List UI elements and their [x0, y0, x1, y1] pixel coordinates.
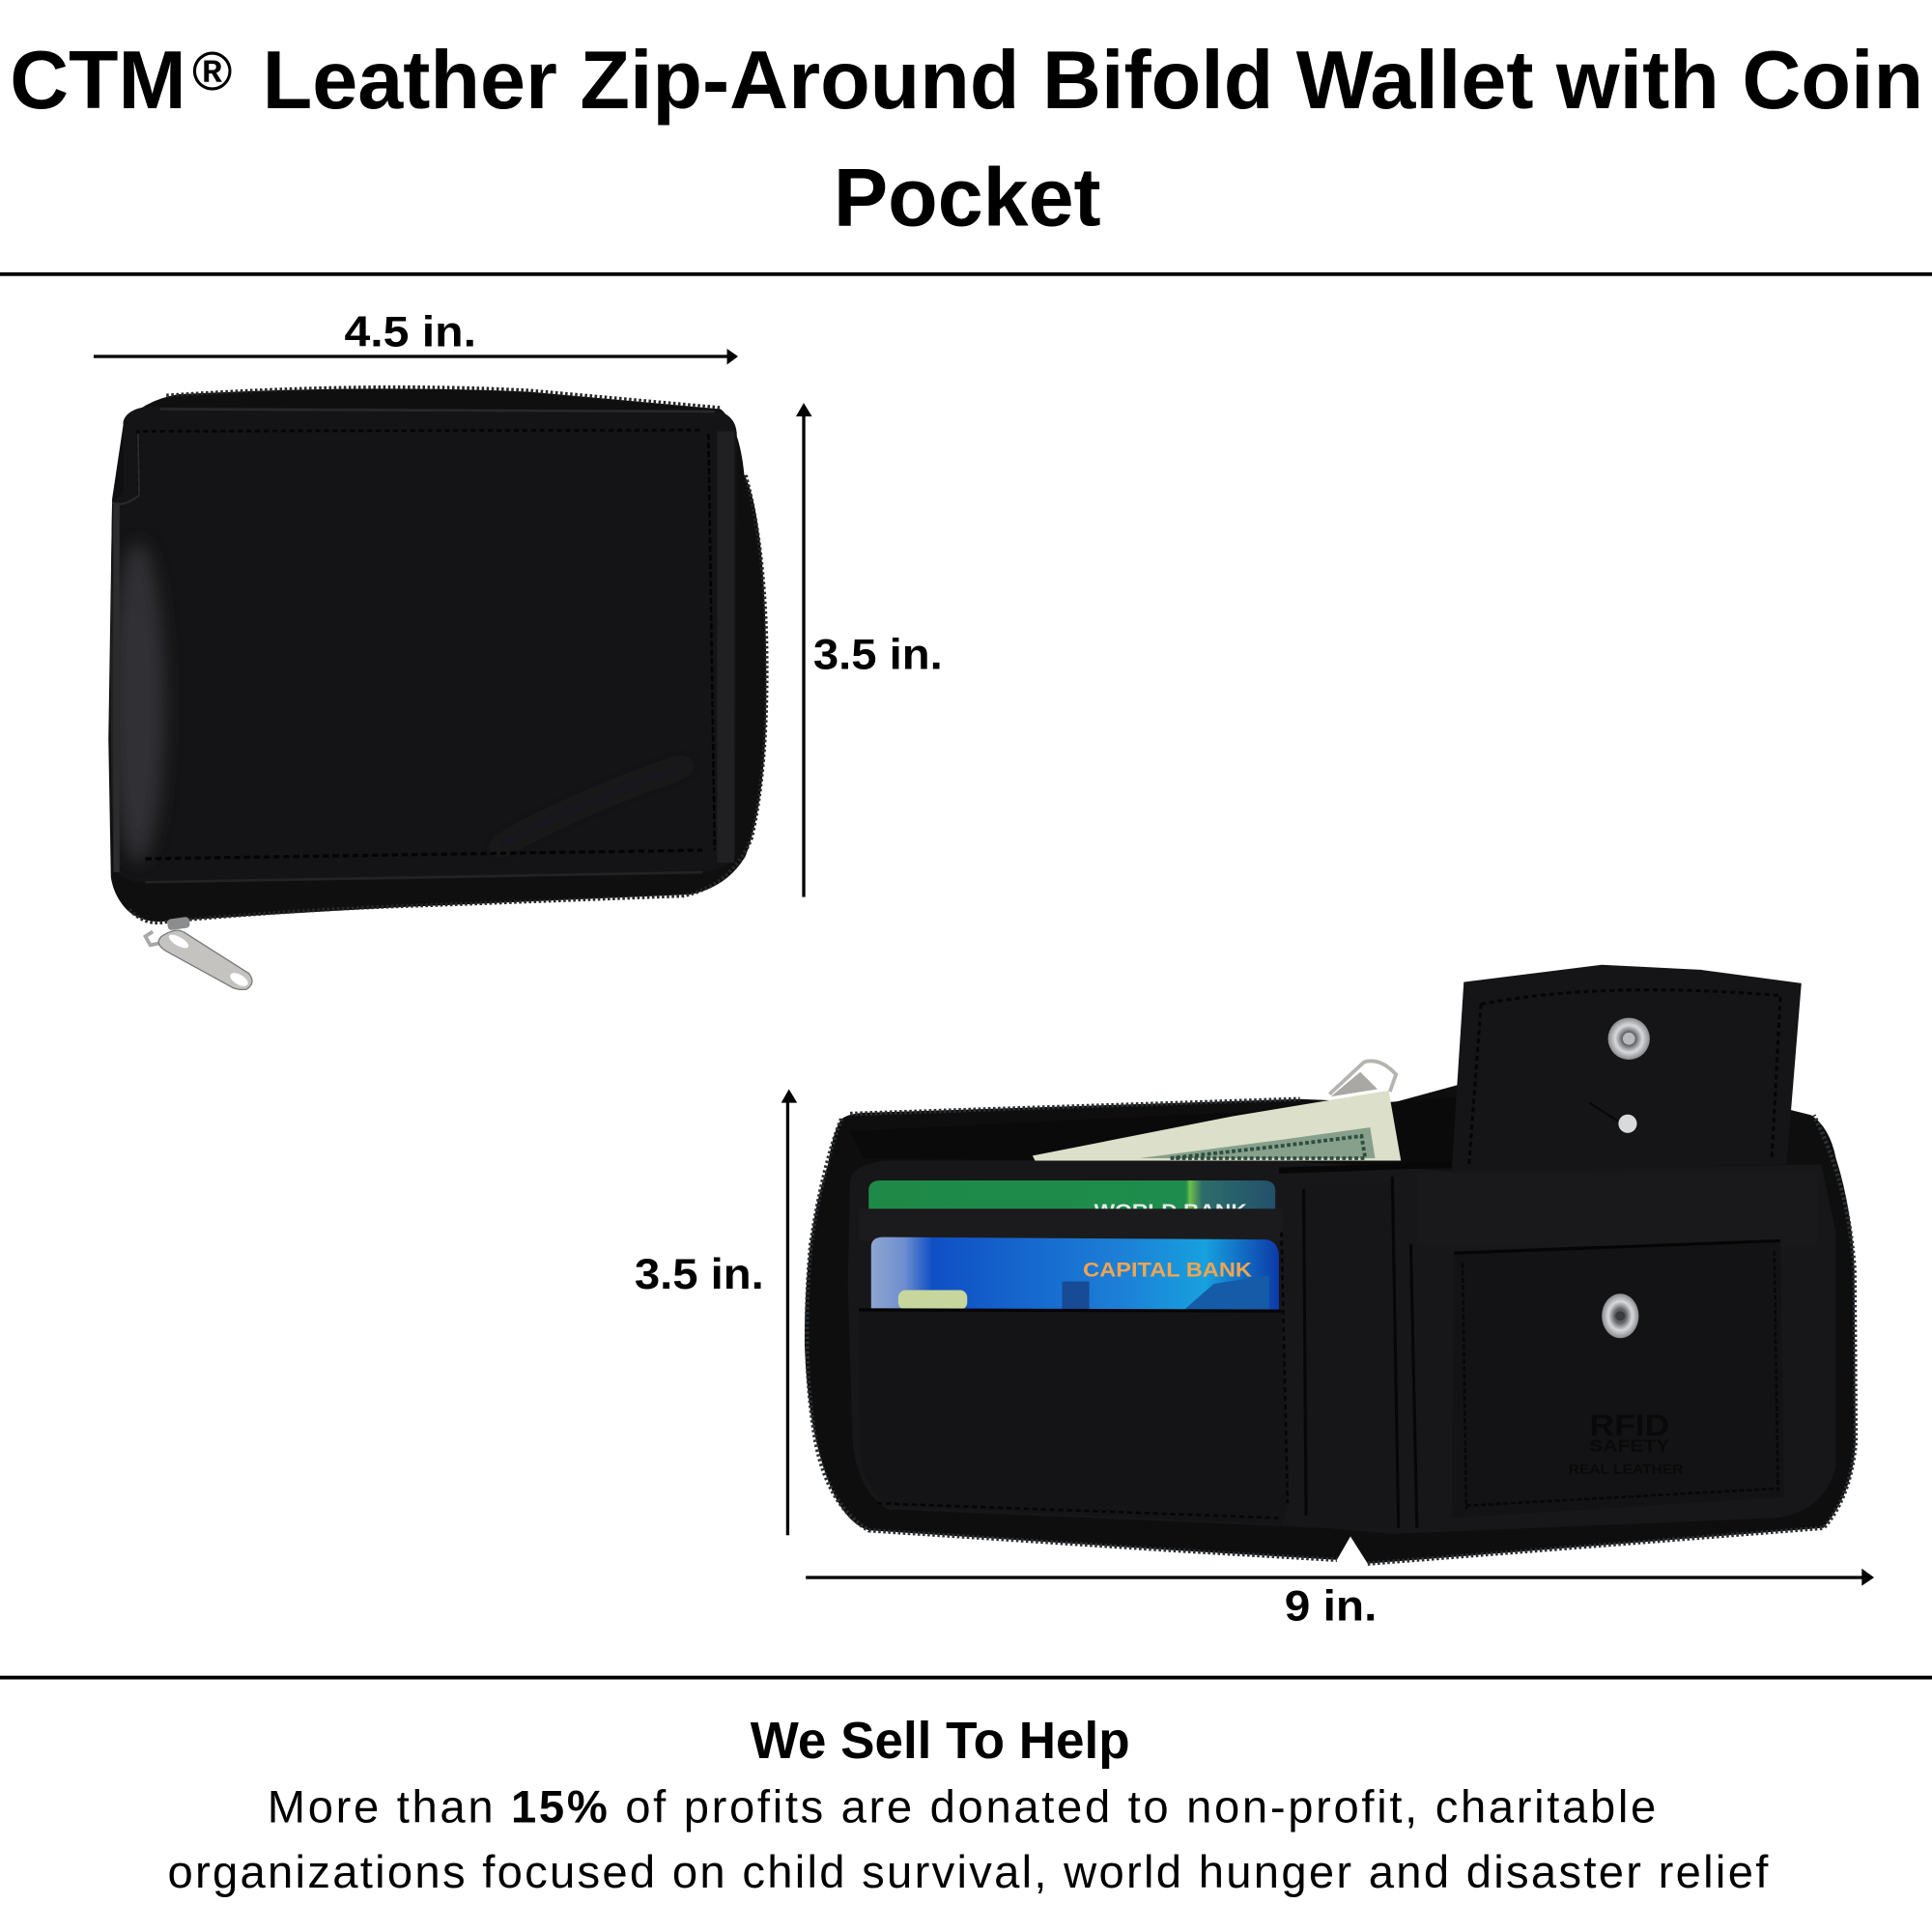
interior leather [848, 1161, 1836, 1534]
zipper edge [807, 1099, 1856, 1564]
dollar bill [1033, 1091, 1401, 1161]
photo: closed wallet [108, 387, 767, 989]
raised coin flap [1452, 965, 1802, 1172]
embossed RFID mark: RFID [1589, 1407, 1669, 1442]
embossed RFID mark: REAL LEATHER [1569, 1462, 1683, 1477]
dimension: top wallet height: 3.5 in. [813, 632, 943, 679]
dimension: top wallet width: 4.5 in. [345, 308, 476, 355]
card: Capital Bank [871, 1237, 1279, 1311]
dimension: top wallet height [796, 403, 943, 897]
stitching [138, 430, 702, 496]
photo: open wallet [805, 965, 1856, 1564]
upper right panel [1417, 1173, 1817, 1247]
section heading: we sell to help: We Sell To Help [751, 1713, 1130, 1770]
title: Pocket [834, 152, 1101, 243]
dimension: open wallet height [635, 1090, 797, 1535]
dimension: open wallet width: 9 in. [1285, 1582, 1377, 1630]
donation statement: organizations focused on child survival, world hunger and disaster relief [167, 1847, 1769, 1898]
dimension: open wallet height: 3.5 in. [635, 1251, 764, 1298]
card: World Bank [868, 1180, 1275, 1222]
embossed RFID mark: SAFETY [1589, 1436, 1669, 1456]
card: Capital Bank: CAPITAL BANK [1083, 1257, 1252, 1281]
title: ® [192, 41, 232, 101]
dimension: open wallet width [806, 1569, 1874, 1630]
card slot [859, 1208, 1283, 1240]
zipper pull behind bill [1329, 1061, 1396, 1096]
leather front panel [111, 407, 737, 882]
leather shading [111, 431, 734, 872]
coin pocket with snap [1452, 1240, 1784, 1518]
zipper teeth [129, 387, 767, 923]
inner back band [850, 1096, 1460, 1164]
card pocket [859, 1233, 1289, 1524]
title: CTM [10, 35, 186, 127]
donation statement: More than 15% of profits are donated to non-profit, charitable [268, 1781, 1656, 1833]
outer shell [805, 1084, 1856, 1564]
embossed RFID mark [1569, 1407, 1683, 1477]
title [10, 35, 1923, 243]
donation statement [167, 1781, 1769, 1898]
title: Leather Zip-Around Bifold Wallet with Coin [263, 35, 1923, 127]
zipper band [108, 388, 766, 922]
center spine [1279, 1164, 1454, 1528]
card: World Bank: WORLD BANK [1094, 1202, 1247, 1222]
dimension: top wallet width [94, 308, 738, 365]
zipper pull [146, 917, 252, 989]
